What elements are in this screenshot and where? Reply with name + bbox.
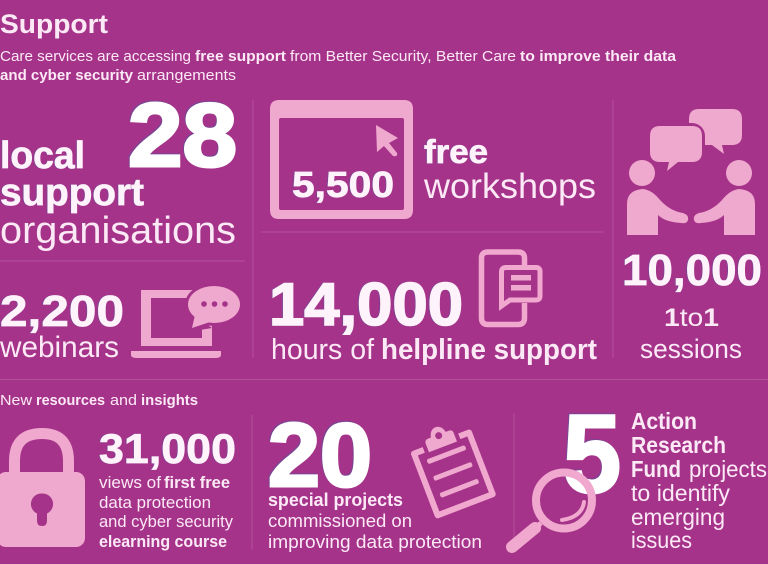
stat: 5 action research fund projects: to identify — [631, 480, 730, 506]
intro text: arrangements — [137, 67, 236, 84]
stat: 5 action research fund projects: issues — [631, 527, 692, 553]
icon: magnifying glass — [512, 472, 592, 547]
stat: 10,000 1to1 sessions — [622, 109, 762, 364]
icon: clipboard — [408, 417, 493, 515]
stat: 31,000 elearning views: first free — [164, 474, 230, 492]
stat: 14,000 hours of helpline support — [269, 252, 597, 366]
stat: 20 special projects: 20 — [268, 406, 372, 506]
section heading: new resources and insights: insights — [141, 392, 198, 409]
stat: 14,000 hours of helpline support: hours of — [271, 334, 375, 366]
intro text: and cyber security — [0, 67, 134, 84]
stat: 28 local support organisations: local — [0, 135, 85, 177]
stat: 31,000 elearning views: 31,000 — [99, 425, 236, 472]
stat: 10,000 1to1 sessions: 1to1 — [664, 304, 719, 332]
stat: 31,000 elearning views: data protection — [99, 494, 211, 512]
stat: 2,200 webinars — [0, 283, 243, 364]
stat: 20 special projects: commissioned on — [268, 511, 412, 531]
icon: padlock — [0, 434, 85, 547]
stat: 2,200 webinars: webinars — [0, 331, 119, 364]
intro text: to improve their data — [520, 48, 677, 65]
stat: 14,000 hours of helpline support: 14,000 — [269, 271, 463, 338]
stat: 20 special projects: special projects — [268, 490, 403, 510]
icon: browser window with cursor — [270, 100, 413, 219]
stat: 5,500 free workshops: workshops — [423, 167, 596, 206]
stat: 5 action research fund projects: projects — [689, 456, 767, 482]
stat: 28 local support organisations: organisations — [0, 210, 236, 252]
stat: 31,000 elearning views: views of — [99, 474, 161, 492]
icon: laptop with speech bubble — [131, 283, 243, 358]
stat: 5,500 free workshops: 5,500 — [292, 164, 394, 205]
stat: 5,500 free workshops: free — [424, 133, 488, 170]
stat: 31,000 elearning views: and cyber security — [99, 513, 234, 531]
stat: 5 action research fund projects: Research — [631, 432, 726, 458]
stat: 20 special projects — [268, 406, 493, 552]
stat: 28 local support organisations: support — [0, 172, 144, 214]
stat: 5 action research fund projects: Action — [631, 408, 697, 434]
intro text: Care services are accessing — [0, 48, 191, 65]
title: Support — [0, 9, 108, 39]
section heading: new resources and insights: and — [110, 392, 137, 409]
stat: 10,000 1to1 sessions: sessions — [640, 334, 742, 364]
stat: 5 action research fund projects — [512, 393, 768, 553]
stat: 5 action research fund projects: emerging — [631, 504, 725, 530]
stat: 5,500 free workshops — [270, 100, 596, 219]
stat: 31,000 elearning views: elearning course — [99, 533, 227, 551]
stat: 28 local support organisations — [0, 86, 237, 252]
stat: 2,200 webinars: 2,200 — [0, 287, 124, 336]
stat: 20 special projects: improving data protection — [268, 532, 482, 552]
stat: 5 action research fund projects: Fund — [631, 456, 681, 482]
intro text: from Better Security, Better Care — [290, 48, 516, 65]
stat: 31,000 elearning views — [0, 425, 238, 551]
stat: 5 action research fund projects: 5 — [563, 393, 621, 516]
section heading: new resources and insights: New — [0, 392, 32, 409]
intro text: free support — [195, 48, 286, 65]
stat: 14,000 hours of helpline support: helpline support — [381, 334, 597, 366]
stat: 28 local support organisations: 28 — [128, 86, 237, 186]
icon: two people talking — [627, 109, 755, 235]
stat: 10,000 1to1 sessions: 10,000 — [622, 246, 762, 295]
icon: phone with message — [482, 252, 540, 324]
section heading: new resources and insights: resources — [36, 392, 105, 409]
